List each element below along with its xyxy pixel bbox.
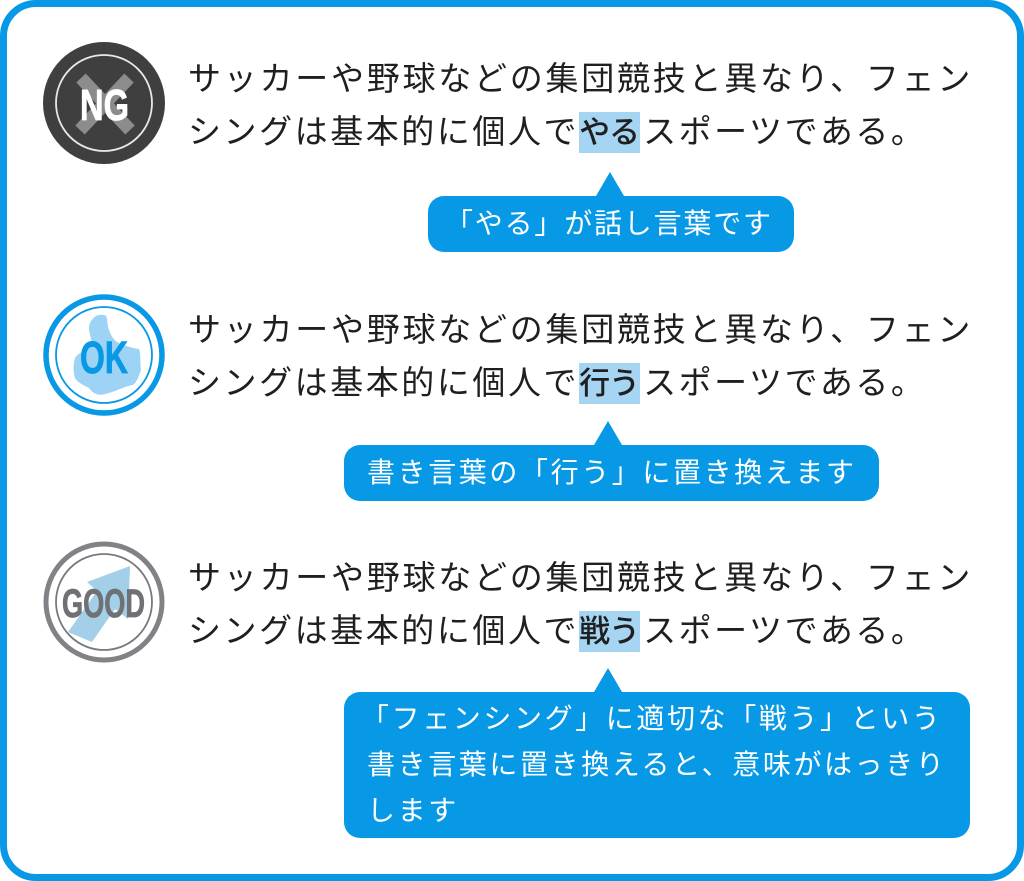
text: OK example sentence: シングは基本的に個人で スポーツである。: [188, 364, 926, 401]
callout: GOOD explanation: 書き言葉に置き換えると、意味がはっきり: [367, 749, 946, 780]
icon: NG badge: NG: [80, 81, 129, 130]
callout: GOOD explanation: します: [367, 795, 459, 826]
callout: OK explanation: 書き言葉の「行う」に置き換えます: [367, 457, 857, 488]
callout: GOOD explanation: 「フェンシング」に適切な「戦う」という: [361, 703, 942, 734]
text: GOOD example sentence: [188, 559, 973, 652]
callout: NG explanation: 「やる」が話し言葉です: [445, 208, 773, 239]
text: GOOD example sentence: サッカーや野球などの集団競技と異なり、フェン: [188, 559, 973, 596]
icon: GOOD badge: GOOD: [62, 582, 145, 626]
icon: OK badge: [43, 294, 165, 416]
icon: OK badge: OK: [80, 332, 128, 383]
text: OK example sentence: サッカーや野球などの集団競技と異なり、フェン: [188, 311, 973, 348]
text: OK example sentence: [188, 311, 973, 404]
text: NG example sentence: サッカーや野球などの集団競技と異なり、フェン: [188, 60, 973, 97]
icon: NG badge: [43, 42, 165, 164]
text: GOOD example sentence: シングは基本的に個人で スポーツである。: [188, 612, 926, 649]
text: NG example sentence: [188, 60, 973, 153]
callout: GOOD explanation: [344, 668, 970, 838]
text: OK example sentence: 行う: [579, 366, 639, 401]
icon: GOOD badge: [44, 542, 164, 662]
text: NG example sentence: やる: [579, 115, 639, 150]
callout: OK explanation: [344, 421, 879, 501]
callout: NG explanation: [428, 172, 794, 252]
text: GOOD example sentence: 戦う: [579, 614, 639, 649]
text: NG example sentence: シングは基本的に個人で スポーツである。: [188, 113, 926, 150]
